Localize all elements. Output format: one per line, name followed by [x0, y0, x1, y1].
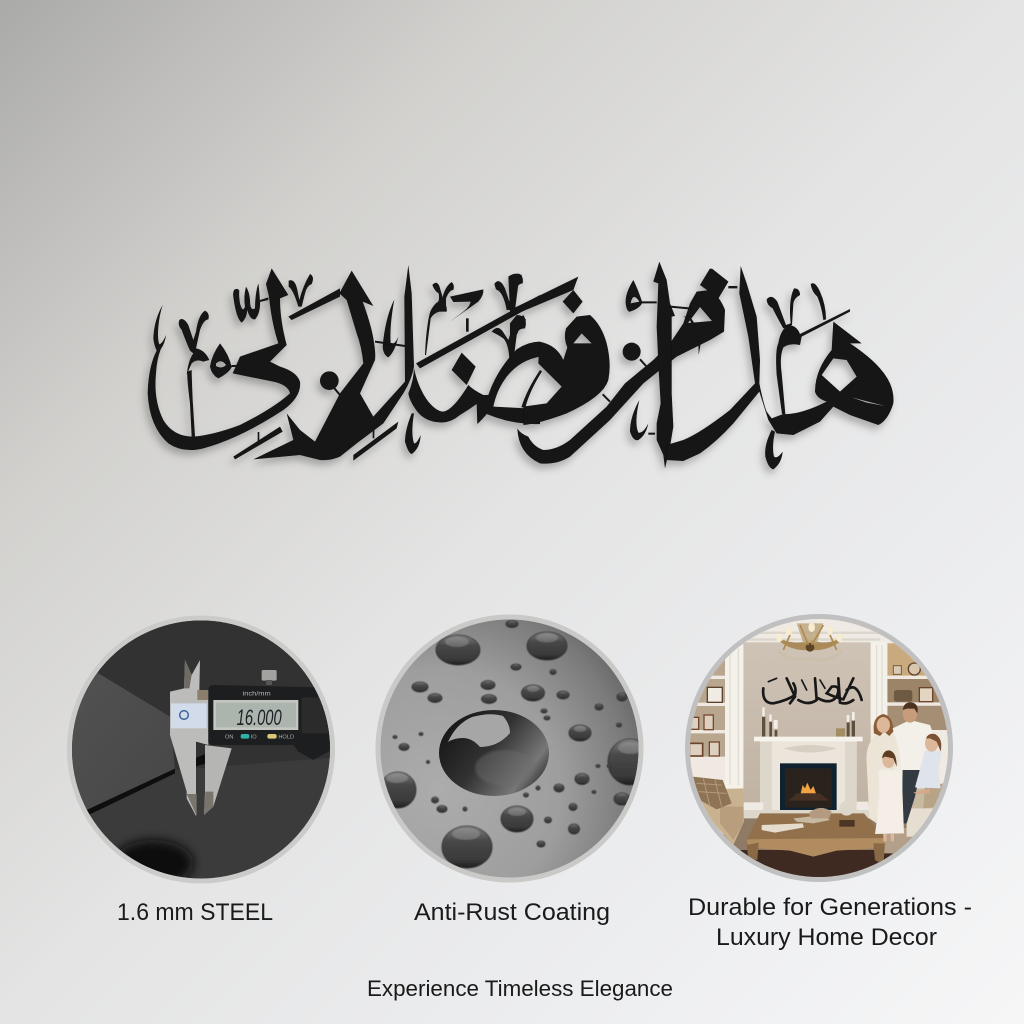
caliper photo: inch/mm	[243, 692, 271, 698]
photo frame ring	[685, 614, 953, 882]
right sofa	[907, 783, 947, 837]
wall art: black steel calligraphy	[148, 262, 893, 469]
woman	[866, 734, 901, 823]
droplet highlights	[386, 634, 642, 840]
calligraphy: right section	[667, 266, 893, 469]
floor	[723, 818, 913, 877]
coffee table and decor	[747, 801, 885, 865]
mini calligraphy on wall	[763, 678, 862, 703]
droplets photo	[380, 620, 638, 878]
caption: Durable for Generations	[688, 894, 972, 951]
caliper photo: IO	[251, 734, 257, 740]
caption: Durable for Generations: Luxury Home Decor	[716, 924, 937, 951]
small droplets	[380, 620, 652, 868]
child	[915, 751, 942, 788]
living room scene	[690, 619, 948, 877]
photo frame ring	[67, 616, 335, 884]
caliper photo: HOLD	[278, 734, 294, 740]
calligraphy: central-right section	[508, 262, 728, 468]
family	[866, 702, 942, 841]
caption: Durable for Generations: Durable for Generations -	[688, 894, 972, 921]
calligraphy: left section	[148, 268, 340, 459]
caliper photo: 16.000	[237, 705, 282, 730]
left bookshelves	[689, 645, 743, 788]
wall	[743, 642, 871, 806]
caliper photo: ON	[225, 734, 233, 740]
panel: 1.6 mm steel caliper photo	[60, 610, 345, 890]
panel: anti-rust water droplets photo	[370, 610, 655, 890]
caption: Anti-Rust Coating: Anti-Rust Coating	[414, 899, 610, 926]
fireplace	[743, 737, 870, 818]
large central droplet	[439, 710, 549, 796]
photo frame ring	[376, 614, 644, 882]
man	[892, 721, 932, 760]
tagline: Experience Timeless Elegance	[367, 976, 673, 1001]
caption: 1.6 mm STEEL: 1.6 mm STEEL	[117, 899, 273, 926]
panel: living room photo	[680, 610, 965, 890]
girl	[875, 771, 904, 834]
caliper photo	[72, 620, 330, 878]
ceiling moulding	[743, 632, 880, 641]
left sofa	[692, 777, 744, 845]
calligraphy: central-left section	[253, 265, 542, 461]
candles and mantel decor	[762, 717, 855, 737]
chandelier	[776, 623, 842, 660]
right bookshelves	[871, 642, 951, 733]
